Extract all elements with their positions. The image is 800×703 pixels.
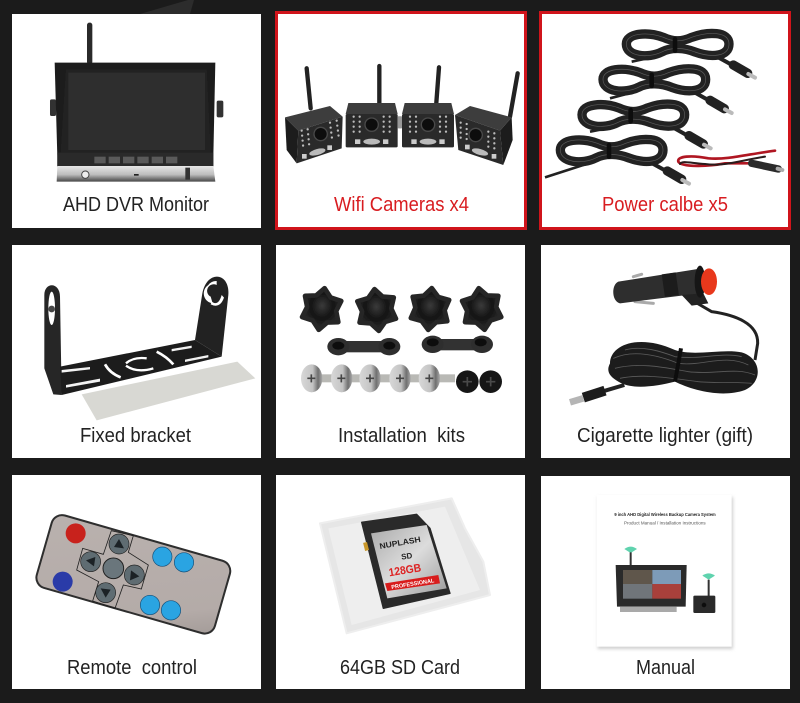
- panel: 64GB SD Card: [276, 475, 525, 689]
- panel: Wifi Cameras x4: [276, 12, 526, 228]
- panel: Manual: [541, 476, 790, 689]
- icon: installation hardware: [301, 286, 503, 393]
- icon: remote: [34, 513, 233, 636]
- icon: SD card in case: NUPLASH: [379, 535, 422, 551]
- panel: AHD DVR Monitor: [12, 14, 261, 228]
- screws: [320, 374, 455, 382]
- red adapter cable: [678, 151, 782, 170]
- label: AHD DVR Monitor: [63, 194, 209, 216]
- spacer plates: [337, 341, 393, 352]
- label: 64GB SD Card: [340, 657, 460, 679]
- panel: Power cable x5: [540, 12, 790, 228]
- d-pad outline: [77, 531, 148, 608]
- icon: SD card in case: [320, 498, 490, 633]
- knob 1: [301, 286, 343, 332]
- icon: manual booklet: Product Manual / Installation Instructions: [624, 521, 706, 526]
- panel: Remote control: [12, 475, 261, 689]
- knob 3: [410, 286, 450, 332]
- icon: four wifi cameras: [285, 66, 518, 165]
- panel: Installation kits: [276, 245, 525, 458]
- knob 2: [356, 287, 397, 333]
- icon: power cables: [545, 33, 782, 184]
- panel: Cigarette lighter: [541, 245, 790, 458]
- faint background streak: [140, 0, 194, 14]
- icon: metal bracket: [44, 277, 255, 420]
- coil 2: [603, 69, 732, 113]
- coil 3: [582, 104, 711, 148]
- label: Wifi Cameras x4: [334, 194, 469, 216]
- label: Fixed bracket: [80, 425, 191, 447]
- label: Cigarette lighter (gift): [577, 425, 753, 447]
- coil 1: [626, 33, 755, 78]
- camera 1: [285, 106, 343, 163]
- camera 3: [399, 103, 454, 147]
- black caps: [456, 370, 479, 393]
- camera 4: [455, 106, 513, 165]
- icon: SD card in case: SD: [401, 551, 413, 562]
- icon: cigarette lighter cable: [570, 266, 758, 402]
- camera 2: [346, 103, 401, 147]
- icon: monitor: [50, 23, 223, 182]
- icon: SD card in case: PROFESSIONAL: [391, 578, 435, 591]
- knob 4: [461, 286, 503, 332]
- coil 4: [560, 139, 689, 184]
- icon: manual booklet: [597, 495, 733, 649]
- panel: Fixed bracket: [12, 245, 261, 458]
- label: Power calbe x5: [602, 194, 728, 216]
- icon: SD card in case: 128GB: [388, 562, 422, 579]
- label: Manual: [636, 657, 695, 679]
- label: Remote control: [67, 657, 197, 679]
- icon: manual booklet: 9 inch AHD Digital Wireless Backup Camera System: [614, 512, 716, 517]
- label: Installation kits: [338, 425, 465, 447]
